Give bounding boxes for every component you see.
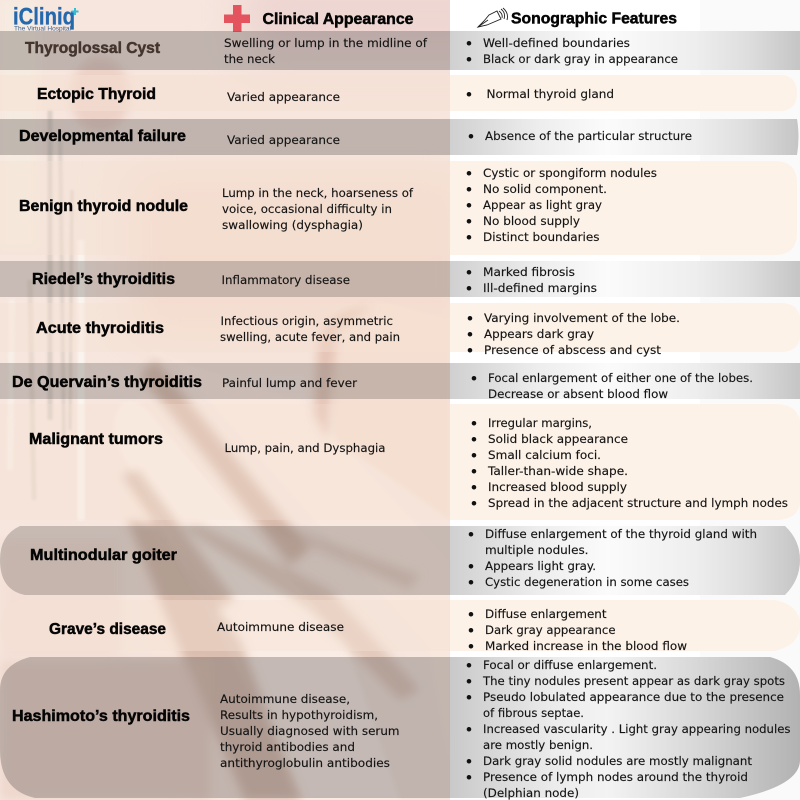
row: Grave's disease: Marked increase in the blood flow — [485, 640, 687, 653]
row: Grave's disease: Autoimmune disease — [217, 621, 344, 634]
row: De Quervain's thyroiditis: Decrease or absent blood flow — [488, 388, 668, 401]
row: Benign thyroid nodule: • — [466, 212, 472, 231]
row: Acute thyroiditis: • — [467, 325, 473, 344]
row: Multinodular goiter — [0, 525, 800, 595]
row: Hashimoto's thyroiditis: Increased vascularity . Light gray appearing nodules — [483, 723, 791, 736]
row: Hashimoto's thyroiditis: • — [466, 768, 472, 787]
row: Grave's disease: • — [468, 621, 474, 640]
background photo: neck and hand — [0, 0, 450, 800]
row: Riedel's thyroiditis: Riedel’s thyroiditis — [32, 271, 175, 288]
row: Hashimoto's thyroiditis: of fibrous septae. — [483, 707, 584, 720]
row: Thyroglossal Cyst — [0, 31, 800, 70]
row: Benign thyroid nodule: Appear as light gray — [483, 199, 602, 212]
row: Acute thyroiditis: swelling, acute fever, and pain — [220, 331, 400, 344]
row: Developmental failure: • — [468, 127, 474, 146]
row: Hashimoto's thyroiditis: Dark gray solid nodules are mostly malignant — [483, 755, 753, 768]
row: Riedel's thyroiditis — [0, 261, 800, 298]
right column white veil — [450, 0, 800, 800]
row: Benign thyroid nodule: No blood supply — [483, 215, 580, 228]
row: Riedel's thyroiditis: Inflammatory disease — [222, 274, 350, 287]
row: Malignant tumors: Solid black appearance — [488, 433, 628, 446]
row: Thyroglossal Cyst: Black or dark gray in appearance — [483, 53, 678, 66]
row: Hashimoto's thyroiditis: Focal or diffuse enlargement. — [483, 659, 657, 672]
row: Acute thyroiditis: Appears dark gray — [484, 328, 594, 341]
row: Hashimoto's thyroiditis — [0, 656, 800, 800]
row: Acute thyroiditis: • — [467, 341, 473, 360]
row: De Quervain's thyroiditis: Painful lump and fever — [222, 377, 357, 390]
heading: Sonographic Features: Sonographic Features — [511, 10, 677, 28]
finger shadows — [0, 306, 420, 800]
row: Multinodular goiter: Multinodular goiter — [30, 547, 177, 564]
row: De Quervain's thyroiditis: • — [471, 369, 477, 388]
row: Benign thyroid nodule: • — [466, 164, 472, 183]
row: Hashimoto's thyroiditis: • — [466, 720, 472, 739]
row: Hashimoto's thyroiditis: Pseudo lobulated appearance due to the presence — [483, 691, 784, 704]
row: Acute thyroiditis — [0, 303, 800, 360]
row: Hashimoto's thyroiditis: Results in hypothyroidism, — [220, 709, 378, 722]
row: Benign thyroid nodule: • — [466, 196, 472, 215]
row: Benign thyroid nodule: • — [466, 180, 472, 199]
row: Hashimoto's thyroiditis: • — [466, 656, 472, 675]
row: De Quervain's thyroiditis — [0, 363, 800, 401]
row: Multinodular goiter: Cystic degeneration in some cases — [485, 576, 689, 589]
logo: iCliniq: The Virtual Hospital — [14, 26, 71, 32]
row: Malignant tumors: Small calcium foci. — [488, 449, 601, 462]
column header: Clinical Appearance — [224, 5, 414, 32]
row: Malignant tumors: • — [471, 446, 477, 465]
row: Thyroglossal Cyst: • — [466, 50, 472, 69]
icon: ultrasound probe — [478, 8, 508, 27]
fingers — [335, 352, 449, 512]
row: Multinodular goiter: • — [468, 573, 474, 592]
row: Ectopic Thyroid: Ectopic Thyroid — [37, 86, 156, 103]
row: Benign thyroid nodule: Benign thyroid nodule — [19, 198, 188, 215]
row: Malignant tumors: • — [471, 478, 477, 497]
row: Benign thyroid nodule: swallowing (dysphagia) — [222, 219, 363, 232]
row: Acute thyroiditis: Varying involvement of the lobe. — [484, 312, 680, 325]
row: Benign thyroid nodule: • — [466, 228, 472, 247]
row: Riedel's thyroiditis: • — [466, 263, 472, 282]
row: Malignant tumors: Increased blood supply — [488, 481, 627, 494]
row: Malignant tumors: • — [471, 462, 477, 481]
row: Malignant tumors: • — [471, 430, 477, 449]
row: Thyroglossal Cyst: the neck — [224, 53, 275, 66]
row: Hashimoto's thyroiditis: • — [466, 672, 472, 691]
row: Malignant tumors: • — [471, 494, 477, 513]
row: Malignant tumors: Irregular margins, — [488, 417, 592, 430]
icon: red medical cross — [224, 5, 250, 32]
row: Acute thyroiditis: Presence of abscess and cyst — [484, 344, 662, 357]
row: Grave's disease — [0, 600, 800, 656]
row: Benign thyroid nodule — [0, 161, 797, 255]
row: Hashimoto's thyroiditis: Presence of lymph nodes around the thyroid — [483, 771, 748, 784]
row: Hashimoto's thyroiditis: • — [466, 688, 472, 707]
row: Grave's disease: • — [468, 605, 474, 624]
row: Multinodular goiter: Diffuse enlargement of the thyroid gland with — [485, 528, 757, 541]
row: Riedel's thyroiditis: Marked fibrosis — [483, 266, 575, 279]
column header: Sonographic Features — [478, 8, 677, 28]
row: Hashimoto's thyroiditis: Autoimmune disease, — [220, 693, 350, 706]
row: Benign thyroid nodule: Distinct boundaries — [483, 231, 600, 244]
row: Acute thyroiditis: • — [467, 309, 473, 328]
row: Developmental failure — [0, 119, 798, 155]
row: De Quervain's thyroiditis: De Quervain’s thyroiditis — [12, 374, 202, 391]
row: Hashimoto's thyroiditis: Usually diagnosed with serum — [220, 725, 400, 738]
row: Hashimoto's thyroiditis: antithyroglobulin antibodies — [220, 757, 390, 770]
row: Grave's disease: • — [468, 637, 474, 656]
row: Malignant tumors — [0, 404, 800, 520]
row: Benign thyroid nodule: Lump in the neck, hoarseness of — [222, 187, 414, 200]
row: Hashimoto's thyroiditis: The tiny nodules present appear as dark gray spots — [482, 675, 785, 688]
row: Multinodular goiter: • — [468, 525, 474, 544]
row: Malignant tumors: Malignant tumors — [29, 431, 163, 448]
row: Thyroglossal Cyst: Well-defined boundaries — [483, 37, 630, 50]
row: Developmental failure: Varied appearance — [227, 134, 340, 147]
row: Malignant tumors: Spread in the adjacent structure and lymph nodes — [488, 497, 788, 510]
row: Hashimoto's thyroiditis: (Delphian node) — [483, 787, 579, 800]
row: Hashimoto's thyroiditis: thyroid antibodies and — [220, 741, 355, 754]
row: Malignant tumors: Lump, pain, and Dysphagia — [224, 442, 386, 455]
row: Acute thyroiditis: Acute thyroiditis — [36, 320, 164, 337]
row: Ectopic Thyroid: Normal thyroid gland — [486, 88, 614, 101]
row: Acute thyroiditis: Infectious origin, asymmetric — [220, 315, 393, 328]
row: De Quervain's thyroiditis: Focal enlargement of either one of the lobes. — [488, 372, 753, 385]
row: Thyroglossal Cyst: • — [466, 34, 472, 53]
row: Hashimoto's thyroiditis: Hashimoto’s thyroiditis — [12, 708, 190, 725]
row: Grave's disease: Diffuse enlargement — [485, 608, 607, 621]
row: Thyroglossal Cyst: Thyroglossal Cyst — [25, 40, 161, 57]
row: Multinodular goiter: • — [468, 557, 474, 576]
row: Thyroglossal Cyst: Swelling or lump in the midline of — [224, 37, 428, 50]
row: Developmental failure: Absence of the particular structure — [485, 130, 692, 143]
row: Riedel's thyroiditis: • — [466, 279, 472, 298]
hair streaks — [10, 110, 81, 520]
row: Benign thyroid nodule: voice, occasional difficulty in — [222, 203, 392, 216]
row: Hashimoto's thyroiditis: • — [466, 752, 472, 771]
row: Benign thyroid nodule: Cystic or spongiform nodules — [483, 167, 657, 180]
row: Malignant tumors: • — [471, 414, 477, 433]
row: Multinodular goiter: multiple nodules. — [485, 544, 588, 557]
heading: Clinical Appearance: Clinical Appearance — [262, 11, 414, 28]
row: Ectopic Thyroid: Varied appearance — [227, 91, 340, 104]
row: Benign thyroid nodule: No solid component. — [483, 183, 607, 196]
row: Multinodular goiter: Appears light gray. — [485, 560, 596, 573]
row: Ectopic Thyroid — [0, 75, 797, 111]
logo: iCliniq: iCliniq — [13, 4, 75, 30]
row: Grave's disease: Dark gray appearance — [485, 624, 616, 637]
row: Developmental failure: Developmental failure — [19, 128, 186, 145]
row: Ectopic Thyroid: • — [466, 85, 472, 104]
row: Hashimoto's thyroiditis: are mostly benign. — [483, 739, 593, 752]
row: Grave's disease: Grave’s disease — [49, 621, 166, 638]
row: Malignant tumors: Taller-than-wide shape. — [487, 465, 628, 478]
row: Riedel's thyroiditis: Ill-defined margins — [483, 282, 597, 295]
